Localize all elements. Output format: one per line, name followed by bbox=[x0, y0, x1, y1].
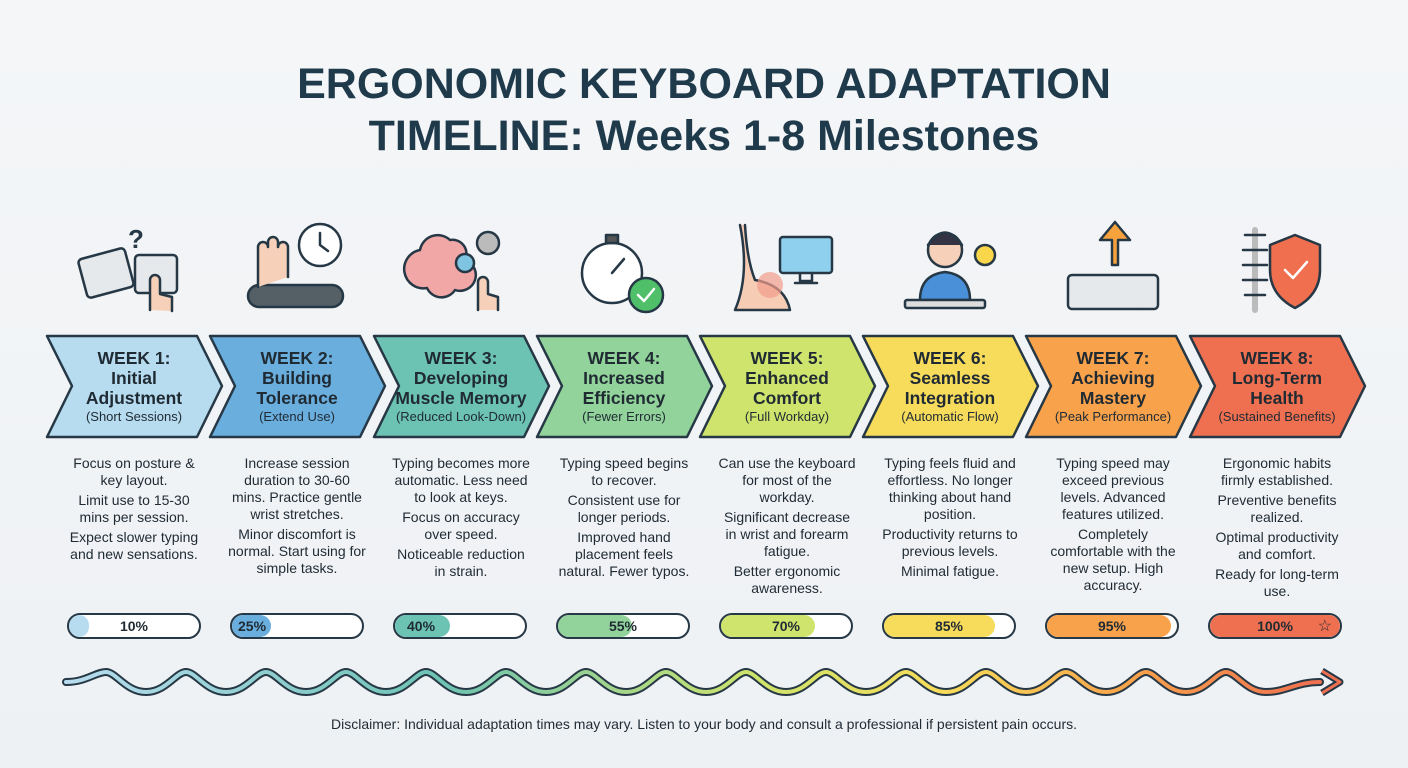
panel: week 8: (Sustained Benefits) bbox=[1218, 409, 1336, 424]
text: week 6: Minimal fatigue. bbox=[901, 563, 999, 579]
panel: week 7 bbox=[1026, 336, 1201, 437]
text: week 6 bbox=[882, 455, 1018, 579]
text: week 2 bbox=[228, 455, 366, 576]
progress: 40%: 40% bbox=[407, 618, 435, 634]
panel: week 3: WEEK 3: bbox=[425, 348, 497, 368]
panel: week 6 bbox=[863, 336, 1038, 437]
panel: week 8: Health bbox=[1250, 388, 1304, 408]
panel: week 7: Mastery bbox=[1080, 388, 1146, 408]
text: week 5: Can use the keyboard for most of the workday. bbox=[718, 455, 855, 505]
panel: week 3: (Reduced Look-Down) bbox=[396, 409, 526, 424]
panel: week 8 bbox=[1190, 336, 1365, 437]
panel: week 1: (Short Sessions) bbox=[86, 409, 182, 424]
icon: shoulder monitor bbox=[735, 225, 832, 310]
panel: week 2 bbox=[210, 336, 385, 437]
progress: 55% bbox=[556, 613, 690, 639]
icon: brain gears bbox=[404, 232, 499, 310]
panel: week 4: Increased bbox=[583, 368, 665, 388]
panel: week 2: Building bbox=[262, 368, 332, 388]
panel: week 4: WEEK 4: bbox=[588, 348, 660, 368]
progress: 95% bbox=[1045, 613, 1179, 639]
icon: person typing bbox=[905, 232, 995, 308]
text: week 4 bbox=[559, 455, 689, 579]
progress: 100% bbox=[1208, 613, 1342, 639]
panel: week 2: WEEK 2: bbox=[261, 348, 333, 368]
text: week 8: Ergonomic habits firmly established. bbox=[1221, 455, 1333, 488]
text: week 3 bbox=[392, 455, 530, 579]
panel: week 6: (Automatic Flow) bbox=[901, 409, 999, 424]
progress: 55%: 55% bbox=[609, 618, 637, 634]
panel: week 1: WEEK 1: bbox=[98, 348, 170, 368]
text: week 4: Improved hand placement feels natural. Fewer typos. bbox=[559, 529, 689, 579]
icons row bbox=[77, 220, 1322, 314]
text: week 5: Significant decrease in wrist and forearm fatigue. bbox=[724, 509, 850, 559]
progress: 85% bbox=[882, 613, 1016, 639]
text: week 5 bbox=[718, 455, 855, 596]
text: week 1: Expect slower typing and new sensations. bbox=[70, 529, 198, 562]
text: week 1: Focus on posture & key layout. bbox=[73, 455, 195, 488]
progress: 100%: ☆ bbox=[1318, 618, 1332, 635]
icon: keyboard and question: ? bbox=[128, 224, 144, 254]
progress: 100%: 100% bbox=[1257, 618, 1293, 634]
text: week 2: Minor discomfort is normal. Start using for simple tasks. bbox=[228, 526, 366, 576]
title: TIMELINE: Weeks 1-8 Milestones bbox=[369, 112, 1039, 160]
progress: 70% bbox=[719, 613, 853, 639]
progress: 85%: 85% bbox=[935, 618, 963, 634]
text: week 8 bbox=[1215, 455, 1339, 599]
progress: 10%: 10% bbox=[120, 618, 148, 634]
panel: week 1: Adjustment bbox=[86, 388, 182, 408]
text: week 5: Better ergonomic awareness. bbox=[734, 563, 840, 596]
text: week 1 bbox=[70, 455, 198, 562]
panel: week 2: (Extend Use) bbox=[259, 409, 335, 424]
title: ERGONOMIC KEYBOARD ADAPTATION bbox=[297, 60, 1111, 108]
panel: week 7: Achieving bbox=[1071, 368, 1155, 388]
panel: week 6: Seamless bbox=[910, 368, 991, 388]
panel: week 3 bbox=[374, 336, 549, 437]
text: week 3: Focus on accuracy over speed. bbox=[402, 509, 520, 542]
text: week 4: Typing speed begins to recover. bbox=[560, 455, 688, 488]
icon: hand and clock bbox=[248, 224, 343, 307]
panel: week 8: WEEK 8: bbox=[1241, 348, 1313, 368]
panel: week 4 bbox=[537, 336, 712, 437]
text: week 8: Preventive benefits realized. bbox=[1217, 492, 1337, 525]
progress: 40% bbox=[393, 613, 527, 639]
text: week 7: Completely comfortable with the new setup. High accuracy. bbox=[1050, 526, 1176, 593]
text: week 3: Typing becomes more automatic. Less need to look at keys. bbox=[392, 455, 530, 505]
text: week 8: Optimal productivity and comfort. bbox=[1216, 529, 1338, 562]
panel: week 4: (Fewer Errors) bbox=[582, 409, 666, 424]
panel: week 6: Integration bbox=[905, 388, 995, 408]
text: week 7 bbox=[1050, 455, 1176, 593]
disclaimer: Disclaimer: Individual adaptation times may vary. Listen to your body and consult a professional if persistent pain occurs. bbox=[331, 716, 1077, 732]
text: week 7: Typing speed may exceed previous levels. Advanced features utilized. bbox=[1056, 455, 1170, 522]
panel: week 5: (Full Workday) bbox=[745, 409, 829, 424]
text: week 4: Consistent use for longer periods. bbox=[568, 492, 680, 525]
text: week 6: Typing feels fluid and effortless. No longer thinking about hand position. bbox=[884, 455, 1016, 522]
icon: stopwatch bbox=[582, 235, 663, 312]
progress: 25%: 25% bbox=[238, 618, 266, 634]
icon: keyboard and question bbox=[78, 224, 177, 311]
progress: 70%: 70% bbox=[772, 618, 800, 634]
panel: week 2: Tolerance bbox=[256, 388, 338, 408]
panel: week 4: Efficiency bbox=[583, 388, 666, 408]
chevrons bbox=[46, 334, 1366, 438]
title bbox=[297, 60, 1111, 160]
arrow: wavy timeline bbox=[62, 668, 1344, 696]
panel: week 3: Muscle Memory bbox=[395, 388, 527, 408]
panel: week 5: Comfort bbox=[753, 388, 821, 408]
text: week 8: Ready for long-term use. bbox=[1215, 566, 1339, 599]
text: week 1: Limit use to 15-30 mins per session. bbox=[78, 492, 190, 525]
icon: spine shield bbox=[1243, 230, 1320, 310]
panel: week 3: Developing bbox=[414, 368, 508, 388]
text: week 2: Increase session duration to 30-60 mins. Practice gentle wrist stretches. bbox=[232, 455, 362, 522]
panel: week 6: WEEK 6: bbox=[914, 348, 986, 368]
panel: week 1 bbox=[47, 336, 222, 437]
progress: 95%: 95% bbox=[1098, 618, 1126, 634]
panel: week 7: (Peak Performance) bbox=[1055, 409, 1171, 424]
panel: week 8: Long-Term bbox=[1232, 368, 1322, 388]
text: week 3: Noticeable reduction in strain. bbox=[397, 546, 525, 579]
icon: keyboard arrow up bbox=[1068, 222, 1158, 309]
panel: week 7: WEEK 7: bbox=[1077, 348, 1149, 368]
panel: week 1: Initial bbox=[111, 368, 157, 388]
progress: 25% bbox=[230, 613, 364, 639]
panel: week 5: WEEK 5: bbox=[751, 348, 823, 368]
text: week 6: Productivity returns to previous levels. bbox=[882, 526, 1018, 559]
panel: week 5 bbox=[700, 336, 875, 437]
progress: 10% bbox=[67, 613, 201, 639]
panel: week 5: Enhanced bbox=[745, 368, 829, 388]
